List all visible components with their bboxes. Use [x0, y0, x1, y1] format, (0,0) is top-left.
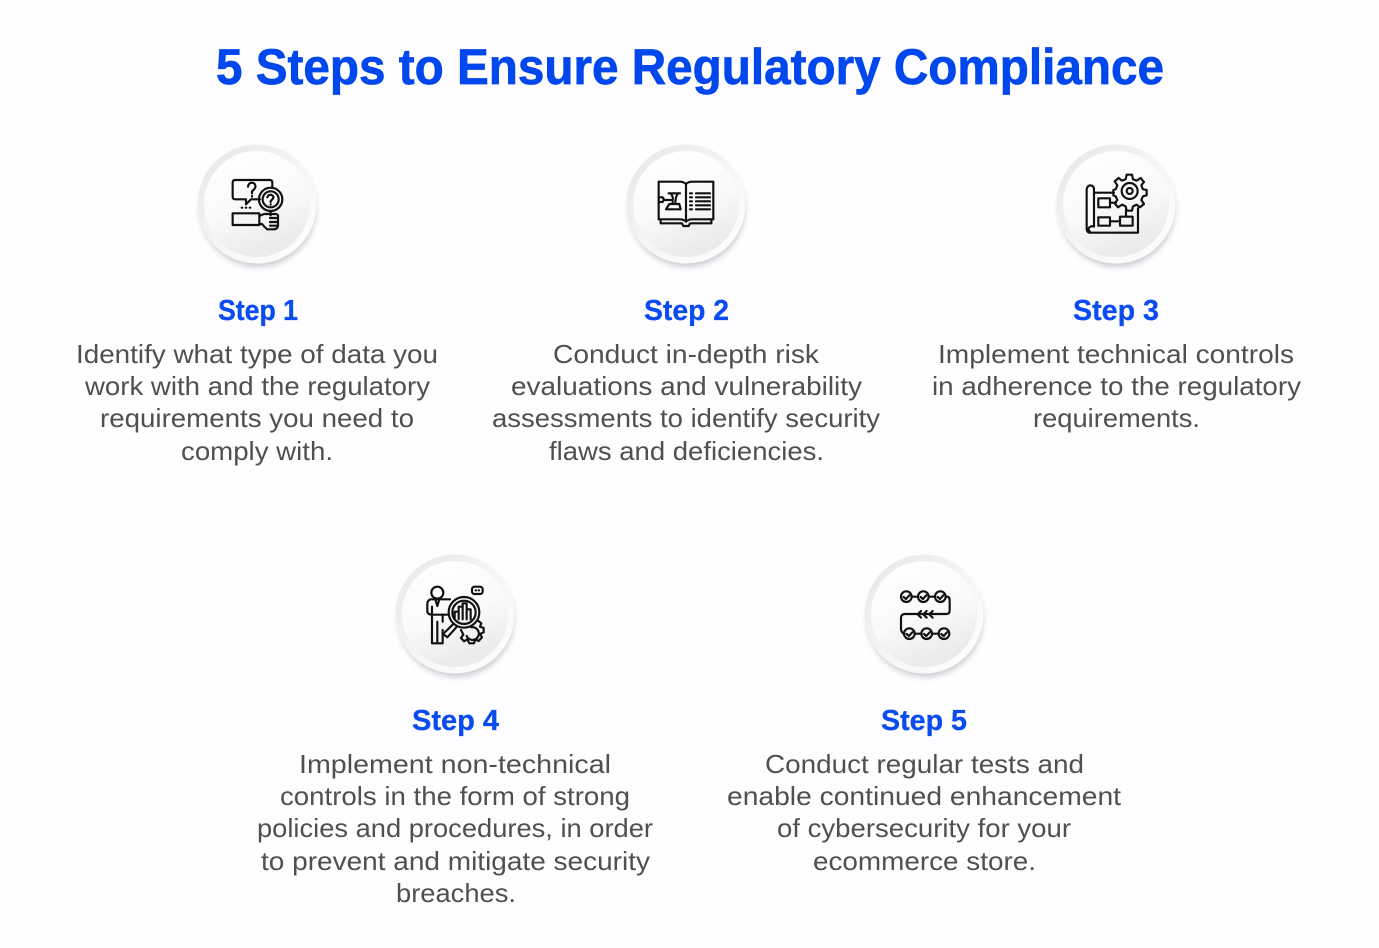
- panel: step 3: [932, 144, 1301, 433]
- icon: question speech bubble and magnifier: [198, 144, 316, 267]
- text block: Identify what type of data you: [76, 339, 438, 369]
- panel: step 5: [727, 554, 1122, 876]
- text block: evaluations and vulnerability: [511, 371, 862, 401]
- text block: policies and procedures, in order: [257, 813, 653, 843]
- text block: flaws and deficiencies.: [549, 436, 824, 466]
- text block: work with and the regulatory: [84, 371, 430, 401]
- text block: of cybersecurity for your: [777, 813, 1071, 843]
- text block: [492, 339, 880, 466]
- text block: comply with.: [181, 436, 333, 466]
- text block: [727, 749, 1122, 876]
- text block: assessments to identify security: [492, 403, 880, 433]
- text block: breaches.: [396, 878, 516, 908]
- text block: requirements you need to: [100, 403, 414, 433]
- heading: Step 2: [644, 295, 729, 327]
- heading: Step 5: [881, 705, 967, 737]
- text block: [257, 749, 653, 908]
- text block: [932, 339, 1301, 433]
- text block: enable continued enhancement: [727, 781, 1122, 811]
- text block: in adherence to the regulatory: [932, 371, 1301, 401]
- title: 5 Steps to Ensure Regulatory Compliance: [216, 39, 1164, 95]
- icon: blueprint with gear: [1056, 144, 1176, 267]
- panel: step 2: [492, 144, 880, 466]
- text block: Implement non-technical: [299, 749, 611, 779]
- heading: Step 1: [218, 295, 298, 327]
- heading: Step 4: [412, 705, 499, 737]
- text block: ecommerce store.: [813, 846, 1036, 876]
- icon: person with chart magnifier and gear: [396, 554, 514, 677]
- text block: Implement technical controls: [938, 339, 1294, 369]
- text block: [76, 339, 438, 466]
- text block: Conduct regular tests and: [765, 749, 1084, 779]
- text block: requirements.: [1033, 403, 1200, 433]
- heading: Step 3: [1073, 295, 1159, 327]
- text block: Conduct in-depth risk: [553, 339, 820, 369]
- panel: step 1: [76, 144, 438, 466]
- icon: open book with gavel: [626, 144, 746, 267]
- text block: to prevent and mitigate security: [261, 846, 650, 876]
- text block: controls in the form of strong: [280, 781, 630, 811]
- icon: process flow with checkmarks: [864, 554, 984, 677]
- panel: step 4: [257, 554, 653, 908]
